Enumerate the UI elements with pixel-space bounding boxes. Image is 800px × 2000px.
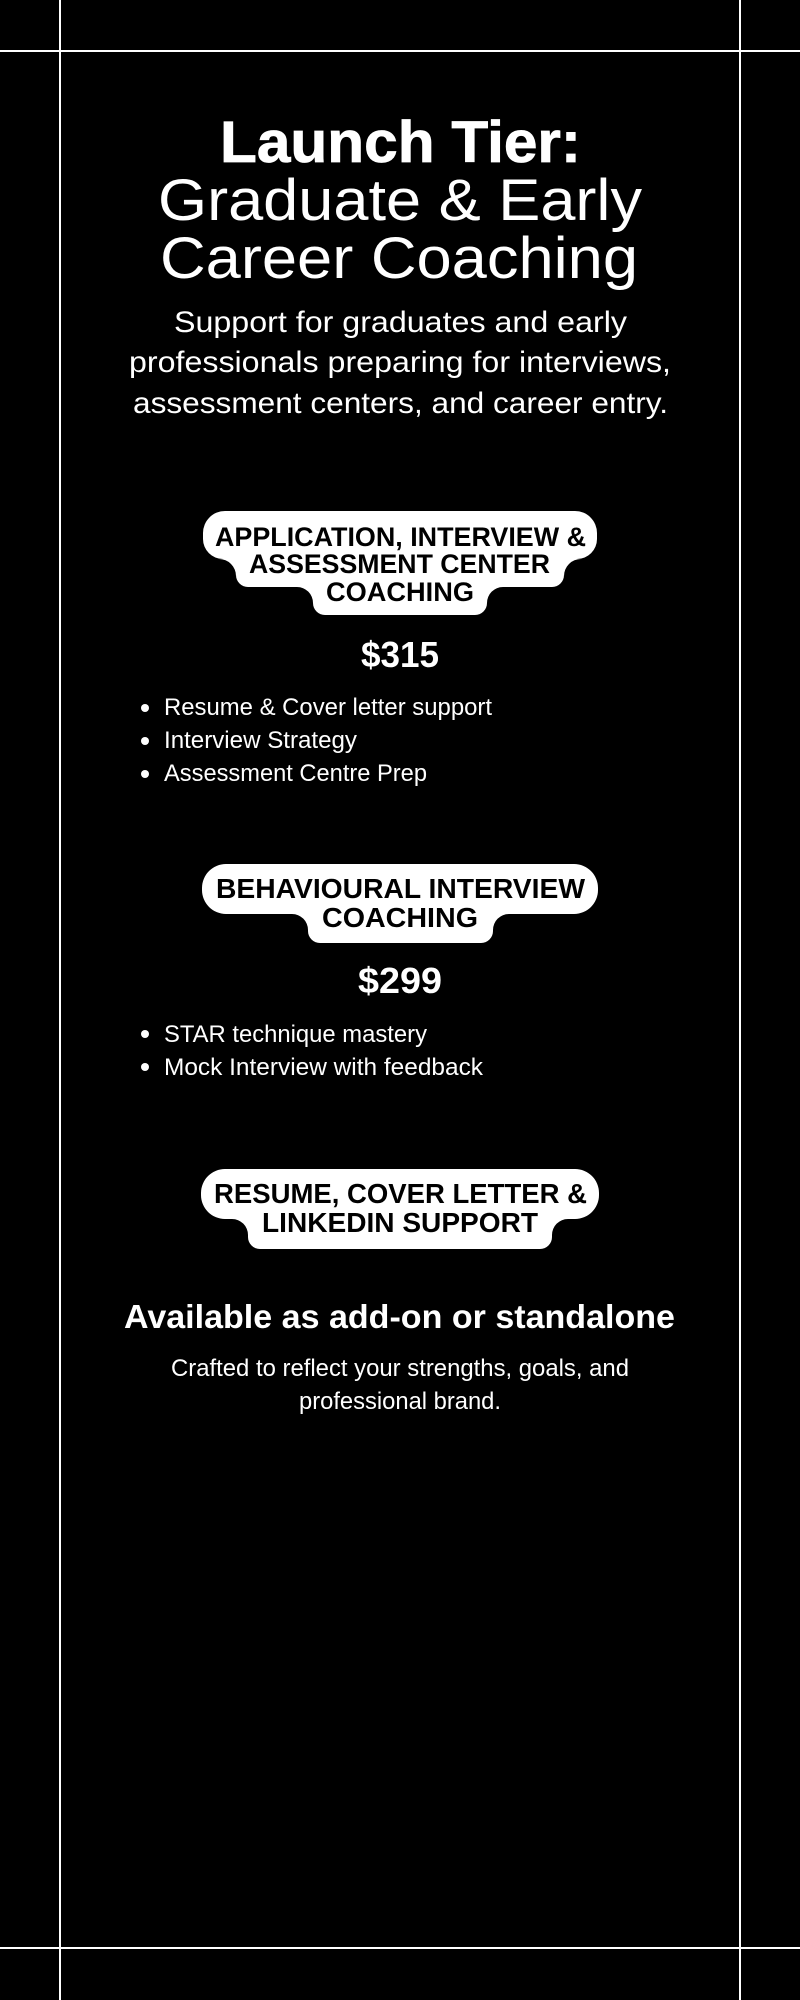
panel: resume, cover letter and linkedin support (124, 1169, 675, 1415)
heading pill: behavioural coaching: BEHAVIOURAL INTERVIEW (216, 873, 586, 904)
intro text: Support for graduates and early (174, 306, 627, 339)
heading pill: behavioural coaching: COACHING (322, 902, 478, 933)
heading pill: resume support: RESUME, COVER LETTER & (214, 1178, 587, 1209)
bullet list: application coaching: Resume & Cover letter support (164, 694, 492, 721)
price: $299: $299 (358, 960, 442, 1001)
heading pill: behavioural coaching (202, 864, 598, 943)
bullet list: behavioural coaching: STAR technique mastery (164, 1021, 427, 1048)
bullet list: behavioural coaching: Mock Interview with feedback (164, 1054, 484, 1081)
heading pill: resume support (201, 1169, 599, 1249)
panel: application, interview and assessment center coaching (141, 511, 597, 787)
heading pill: application coaching: ASSESSMENT CENTER (249, 549, 550, 579)
price: $315: $315 (361, 634, 439, 675)
add-on description: Crafted to reflect your strengths, goals, and (171, 1355, 629, 1382)
add-on description (171, 1355, 629, 1415)
title (158, 110, 642, 291)
intro text (129, 306, 671, 420)
intro text: professionals preparing for interviews, (129, 346, 671, 379)
title: Graduate & Early (158, 168, 642, 233)
intro text: assessment centers, and career entry. (133, 387, 668, 420)
panel: behavioural interview coaching (141, 864, 598, 1081)
heading pill: application coaching (203, 511, 597, 615)
bullet list: application coaching: Assessment Centre Prep (164, 760, 427, 787)
title: Career Coaching (160, 226, 638, 291)
heading pill: application coaching: COACHING (326, 577, 474, 607)
add-on heading: Available as add-on or standalone (124, 1298, 675, 1335)
heading pill: resume support: LINKEDIN SUPPORT (262, 1207, 538, 1238)
title: Launch Tier: (220, 110, 581, 175)
bullet list: application coaching (141, 694, 492, 787)
bullet list: application coaching: Interview Strategy (164, 727, 357, 754)
add-on description: professional brand. (299, 1388, 501, 1415)
bullet list: behavioural coaching (141, 1021, 484, 1081)
heading pill: application coaching: APPLICATION, INTERVIEW & (215, 522, 586, 552)
